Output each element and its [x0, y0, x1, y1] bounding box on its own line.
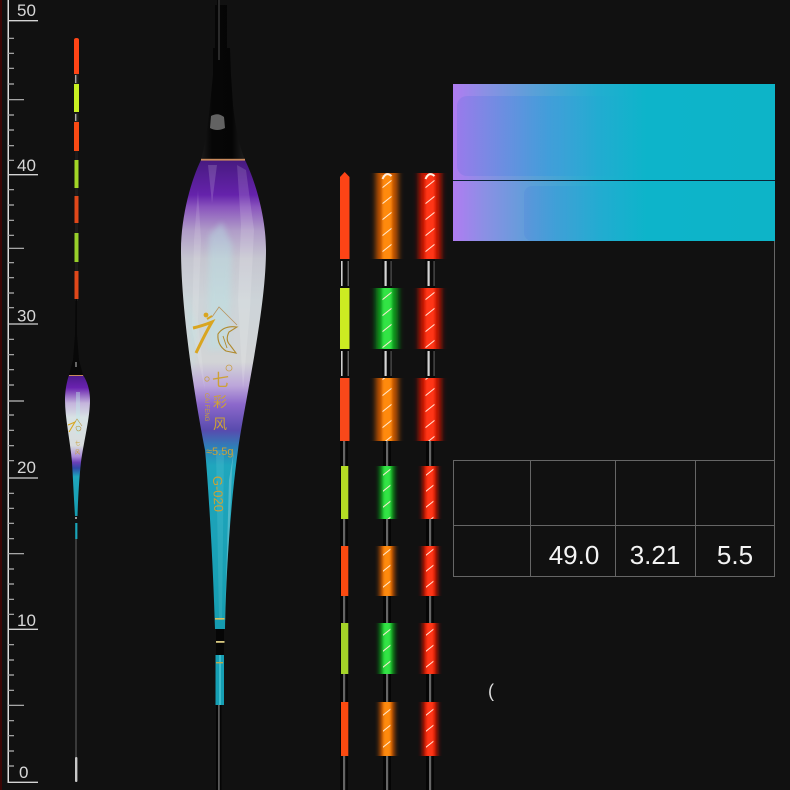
gold brand text: 彩 — [213, 394, 227, 410]
ruler numbers: 20 — [17, 458, 36, 477]
small float full view — [65, 38, 90, 782]
gradient title banner upper — [453, 84, 775, 180]
gold brand text: 七 — [212, 371, 229, 390]
ruler numbers: 10 — [17, 611, 36, 630]
ruler numbers — [17, 1, 36, 782]
lower teal section with gold rings — [215, 618, 224, 705]
antenna tip: night glow red — [419, 173, 441, 790]
float body — [181, 160, 266, 629]
table values — [549, 540, 753, 570]
gold brand text: G-020 — [210, 476, 226, 512]
antenna tip: daylight colours — [340, 172, 350, 790]
ruler scale 0 to 50 — [8, 0, 38, 783]
small float lower tip and stem — [75, 517, 77, 519]
antenna tip: night glow orange and green — [376, 173, 398, 790]
gradient title banner lower — [453, 181, 775, 241]
small float logo marks: 七 — [75, 440, 80, 447]
small float logo marks — [68, 419, 82, 456]
glow halos — [376, 173, 398, 756]
black lower stem — [216, 705, 222, 790]
small float body — [65, 375, 90, 516]
table values: 5.5 — [717, 540, 753, 570]
stem and connectors — [340, 259, 350, 790]
gold brand text: ≈5.5g — [206, 446, 233, 458]
specification table — [453, 241, 775, 576]
gold logo — [193, 307, 237, 381]
table values: 49.0 — [549, 540, 599, 570]
spiral stripes — [426, 180, 434, 756]
body highlights — [186, 165, 254, 620]
black top stem — [201, 0, 245, 160]
small float antenna segments — [74, 38, 79, 301]
stem and connectors — [382, 259, 392, 790]
spiral stripes — [382, 180, 392, 756]
glow halos — [419, 173, 441, 756]
daylight segments — [340, 172, 350, 756]
note opening bracket: ( — [488, 681, 494, 701]
small float logo marks: 风 — [75, 450, 80, 456]
gold brand text — [203, 371, 233, 512]
large float close-up — [181, 0, 266, 790]
ruler numbers: 0 — [19, 763, 28, 782]
ruler numbers: 40 — [17, 156, 36, 175]
small float neck — [69, 299, 83, 375]
gold collar — [201, 159, 245, 161]
glowing cores — [382, 175, 392, 756]
ruler numbers: 30 — [17, 306, 36, 326]
ruler numbers: 50 — [17, 1, 36, 20]
gold brand text: 风 — [213, 416, 227, 432]
gold brand text: CAI FENG — [203, 393, 209, 422]
table values: 3.21 — [630, 540, 680, 570]
table grid — [453, 241, 775, 576]
stem and connectors — [425, 259, 435, 790]
glowing cores — [425, 175, 435, 756]
